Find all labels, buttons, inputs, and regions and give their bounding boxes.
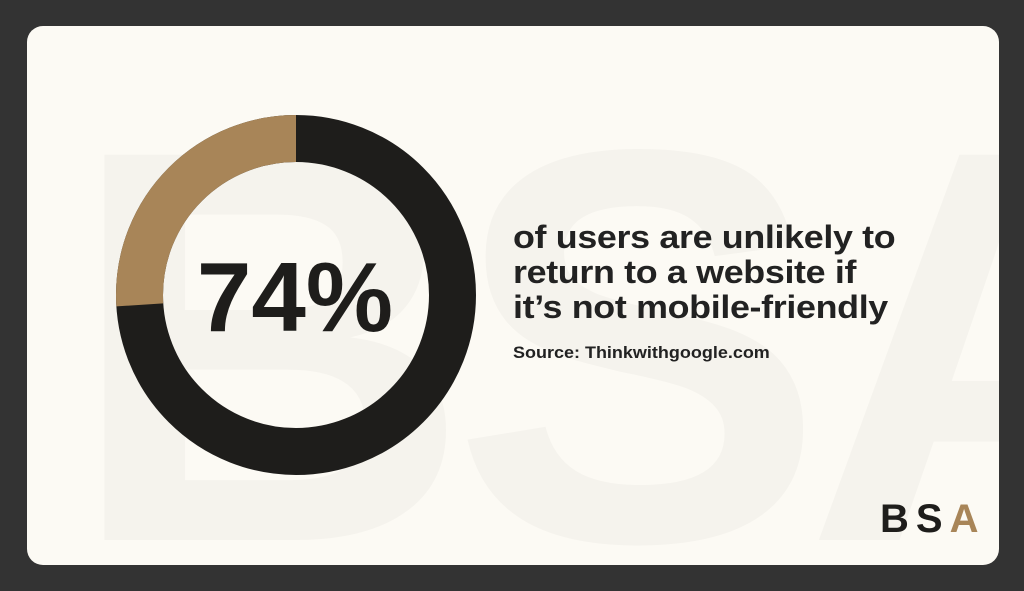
- statement text: [513, 219, 895, 325]
- big number: 74%: [197, 242, 393, 352]
- source: Source: Thinkwithgoogle.com: [513, 344, 770, 362]
- statement text: return to a website if: [513, 254, 856, 290]
- statement text: it’s not mobile-friendly: [513, 289, 888, 325]
- logo: BSA: BSA: [880, 497, 985, 541]
- statement text: of users are unlikely to: [513, 219, 895, 255]
